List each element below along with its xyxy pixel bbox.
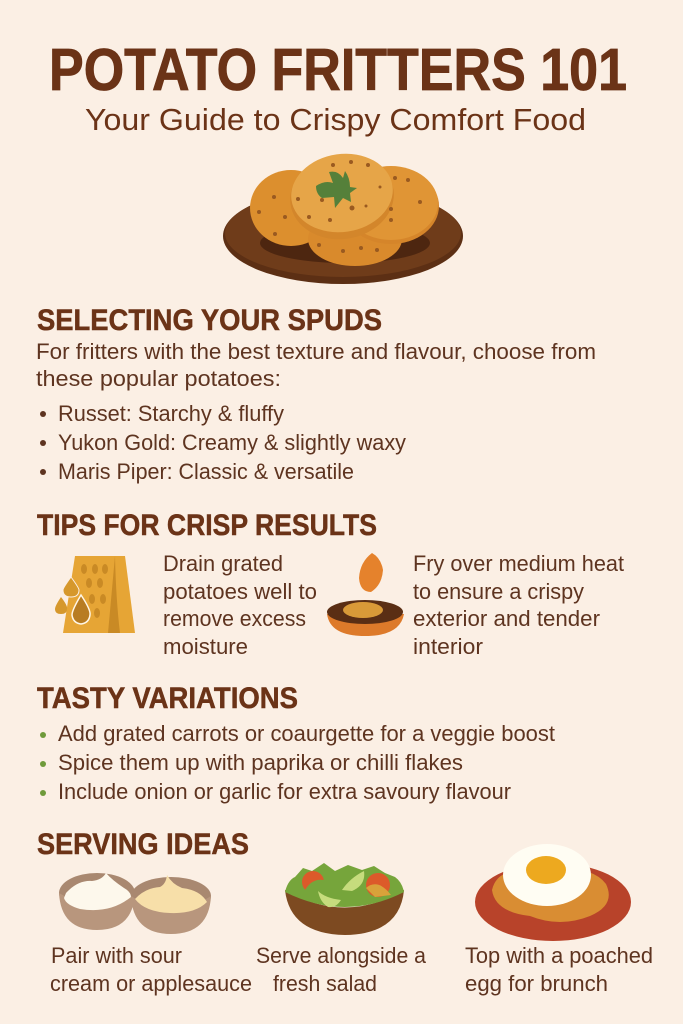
icon: salad bowl <box>285 863 404 935</box>
tip text: fry: Fry over medium heat <box>413 551 625 576</box>
tip text: fry: to ensure a crispy <box>413 579 585 604</box>
tip text: drain <box>163 551 317 659</box>
heading: tasty variations: TASTY VARIATIONS <box>37 682 298 715</box>
serving text: salad: Serve alongside a <box>256 943 426 968</box>
variations list <box>40 721 556 804</box>
icon: grater with water drops <box>55 556 135 633</box>
potato list: Yukon Gold: Creamy & slightly waxy <box>58 430 407 455</box>
potato list: Maris Piper: Classic & versatile <box>58 459 354 484</box>
heading: serving ideas: SERVING IDEAS <box>37 828 249 861</box>
serving text: egg: egg for brunch <box>465 971 608 996</box>
serving text: sauce <box>50 943 252 996</box>
intro text <box>36 339 596 391</box>
serving text: salad: fresh salad <box>273 971 377 996</box>
icon: fritter with egg <box>475 844 631 941</box>
serving text: sauce: Pair with sour <box>51 943 182 968</box>
icon: frying pan with fritter <box>327 553 404 636</box>
variations list: Include onion or garlic for extra savoury flavour <box>58 779 511 804</box>
serving text: egg <box>465 943 653 996</box>
illustration: potato fritters on a plate <box>223 147 463 284</box>
tip text: drain: moisture <box>163 634 248 659</box>
tip text: drain: potatoes well to <box>163 579 317 604</box>
tip text: fry: exterior and tender <box>413 606 600 631</box>
intro text: For fritters with the best texture and flavour, choose from <box>36 339 596 364</box>
serving text: salad <box>256 943 426 996</box>
potato list: Russet: Starchy & fluffy <box>58 401 285 426</box>
tip text: fry: interior <box>413 634 484 659</box>
intro text: these popular potatoes: <box>36 366 281 391</box>
serving text: egg: Top with a poached <box>465 943 653 968</box>
tip text: fry <box>413 551 625 659</box>
serving text: sauce: cream or applesauce <box>50 971 252 996</box>
variations list: Spice them up with paprika or chilli flakes <box>58 750 463 775</box>
variations list: Add grated carrots or coaurgette for a veggie boost <box>58 721 556 746</box>
heading: selecting your spuds: SELECTING YOUR SPUDS <box>37 304 382 337</box>
heading: tips: TIPS FOR CRISP RESULTS <box>37 509 377 542</box>
tip text: drain: Drain grated <box>163 551 283 576</box>
tip text: drain: remove excess <box>163 606 306 631</box>
icon: bowls of sour cream and applesauce <box>59 873 211 934</box>
potato list <box>40 401 407 484</box>
subtitle: Your Guide to Crispy Comfort Food <box>85 102 586 137</box>
